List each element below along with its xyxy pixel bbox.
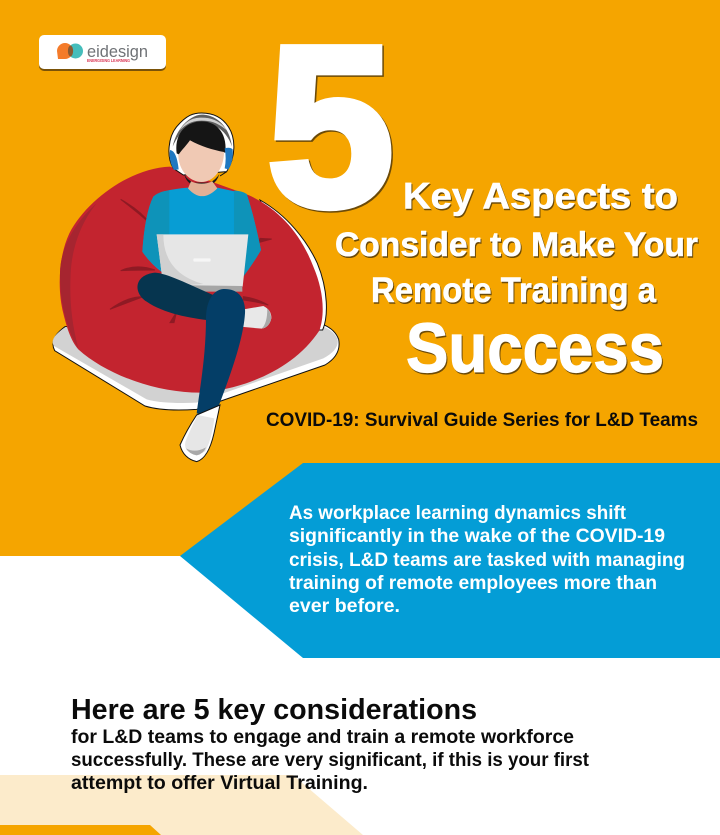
intro paragraph: training of remote employees more than xyxy=(289,573,657,594)
considerations body: successfully. These are very significant, if this is your first xyxy=(71,750,590,771)
considerations body xyxy=(71,727,590,794)
big numeral 5: 5 xyxy=(267,0,394,254)
subtitle: COVID-19: Survival Guide Series for L&D Teams xyxy=(266,410,698,431)
intro paragraph: As workplace learning dynamics shift xyxy=(289,503,627,524)
intro paragraph xyxy=(289,503,685,617)
logo badge xyxy=(39,35,166,71)
title text: Remote Training a xyxy=(371,271,656,310)
considerations body: for L&D teams to engage and train a remote workforce xyxy=(71,727,574,748)
intro paragraph: crisis, L&D teams are tasked with managing xyxy=(289,550,685,571)
torso and arms xyxy=(142,188,261,278)
title text: Key Aspects to xyxy=(404,177,679,218)
front leg xyxy=(197,289,245,417)
title text: Consider to Make Your xyxy=(336,228,699,266)
footer decorative shapes xyxy=(0,775,363,835)
crossed back leg xyxy=(138,273,217,321)
orange header background xyxy=(0,0,720,556)
title text: Success xyxy=(407,310,665,388)
laptop xyxy=(157,234,248,292)
logo badge: ENERGISING LEARNING xyxy=(87,58,131,63)
logo badge: eidesign xyxy=(87,43,148,61)
intro paragraph: significantly in the wake of the COVID-19 xyxy=(289,526,665,547)
considerations body: attempt to offer Virtual Training. xyxy=(71,773,368,794)
head and headset xyxy=(169,113,234,196)
considerations heading: Here are 5 key considerations xyxy=(71,694,477,726)
title text: Key Aspects to xyxy=(403,176,678,216)
title text xyxy=(335,176,699,388)
big numeral 5: 5 xyxy=(268,2,395,256)
title text: Consider to Make Your xyxy=(335,226,698,264)
intro paragraph: ever before. xyxy=(289,596,400,617)
illustration: person on bean bag xyxy=(53,113,339,462)
bean bag rim xyxy=(260,200,326,330)
blue intro panel xyxy=(180,463,720,658)
bean bag cushion base xyxy=(53,325,339,410)
shoe xyxy=(180,405,220,462)
sock behind leg xyxy=(240,306,271,329)
bean bag xyxy=(60,167,323,393)
title text: Remote Training a xyxy=(372,272,657,312)
title text: Success xyxy=(406,309,664,387)
